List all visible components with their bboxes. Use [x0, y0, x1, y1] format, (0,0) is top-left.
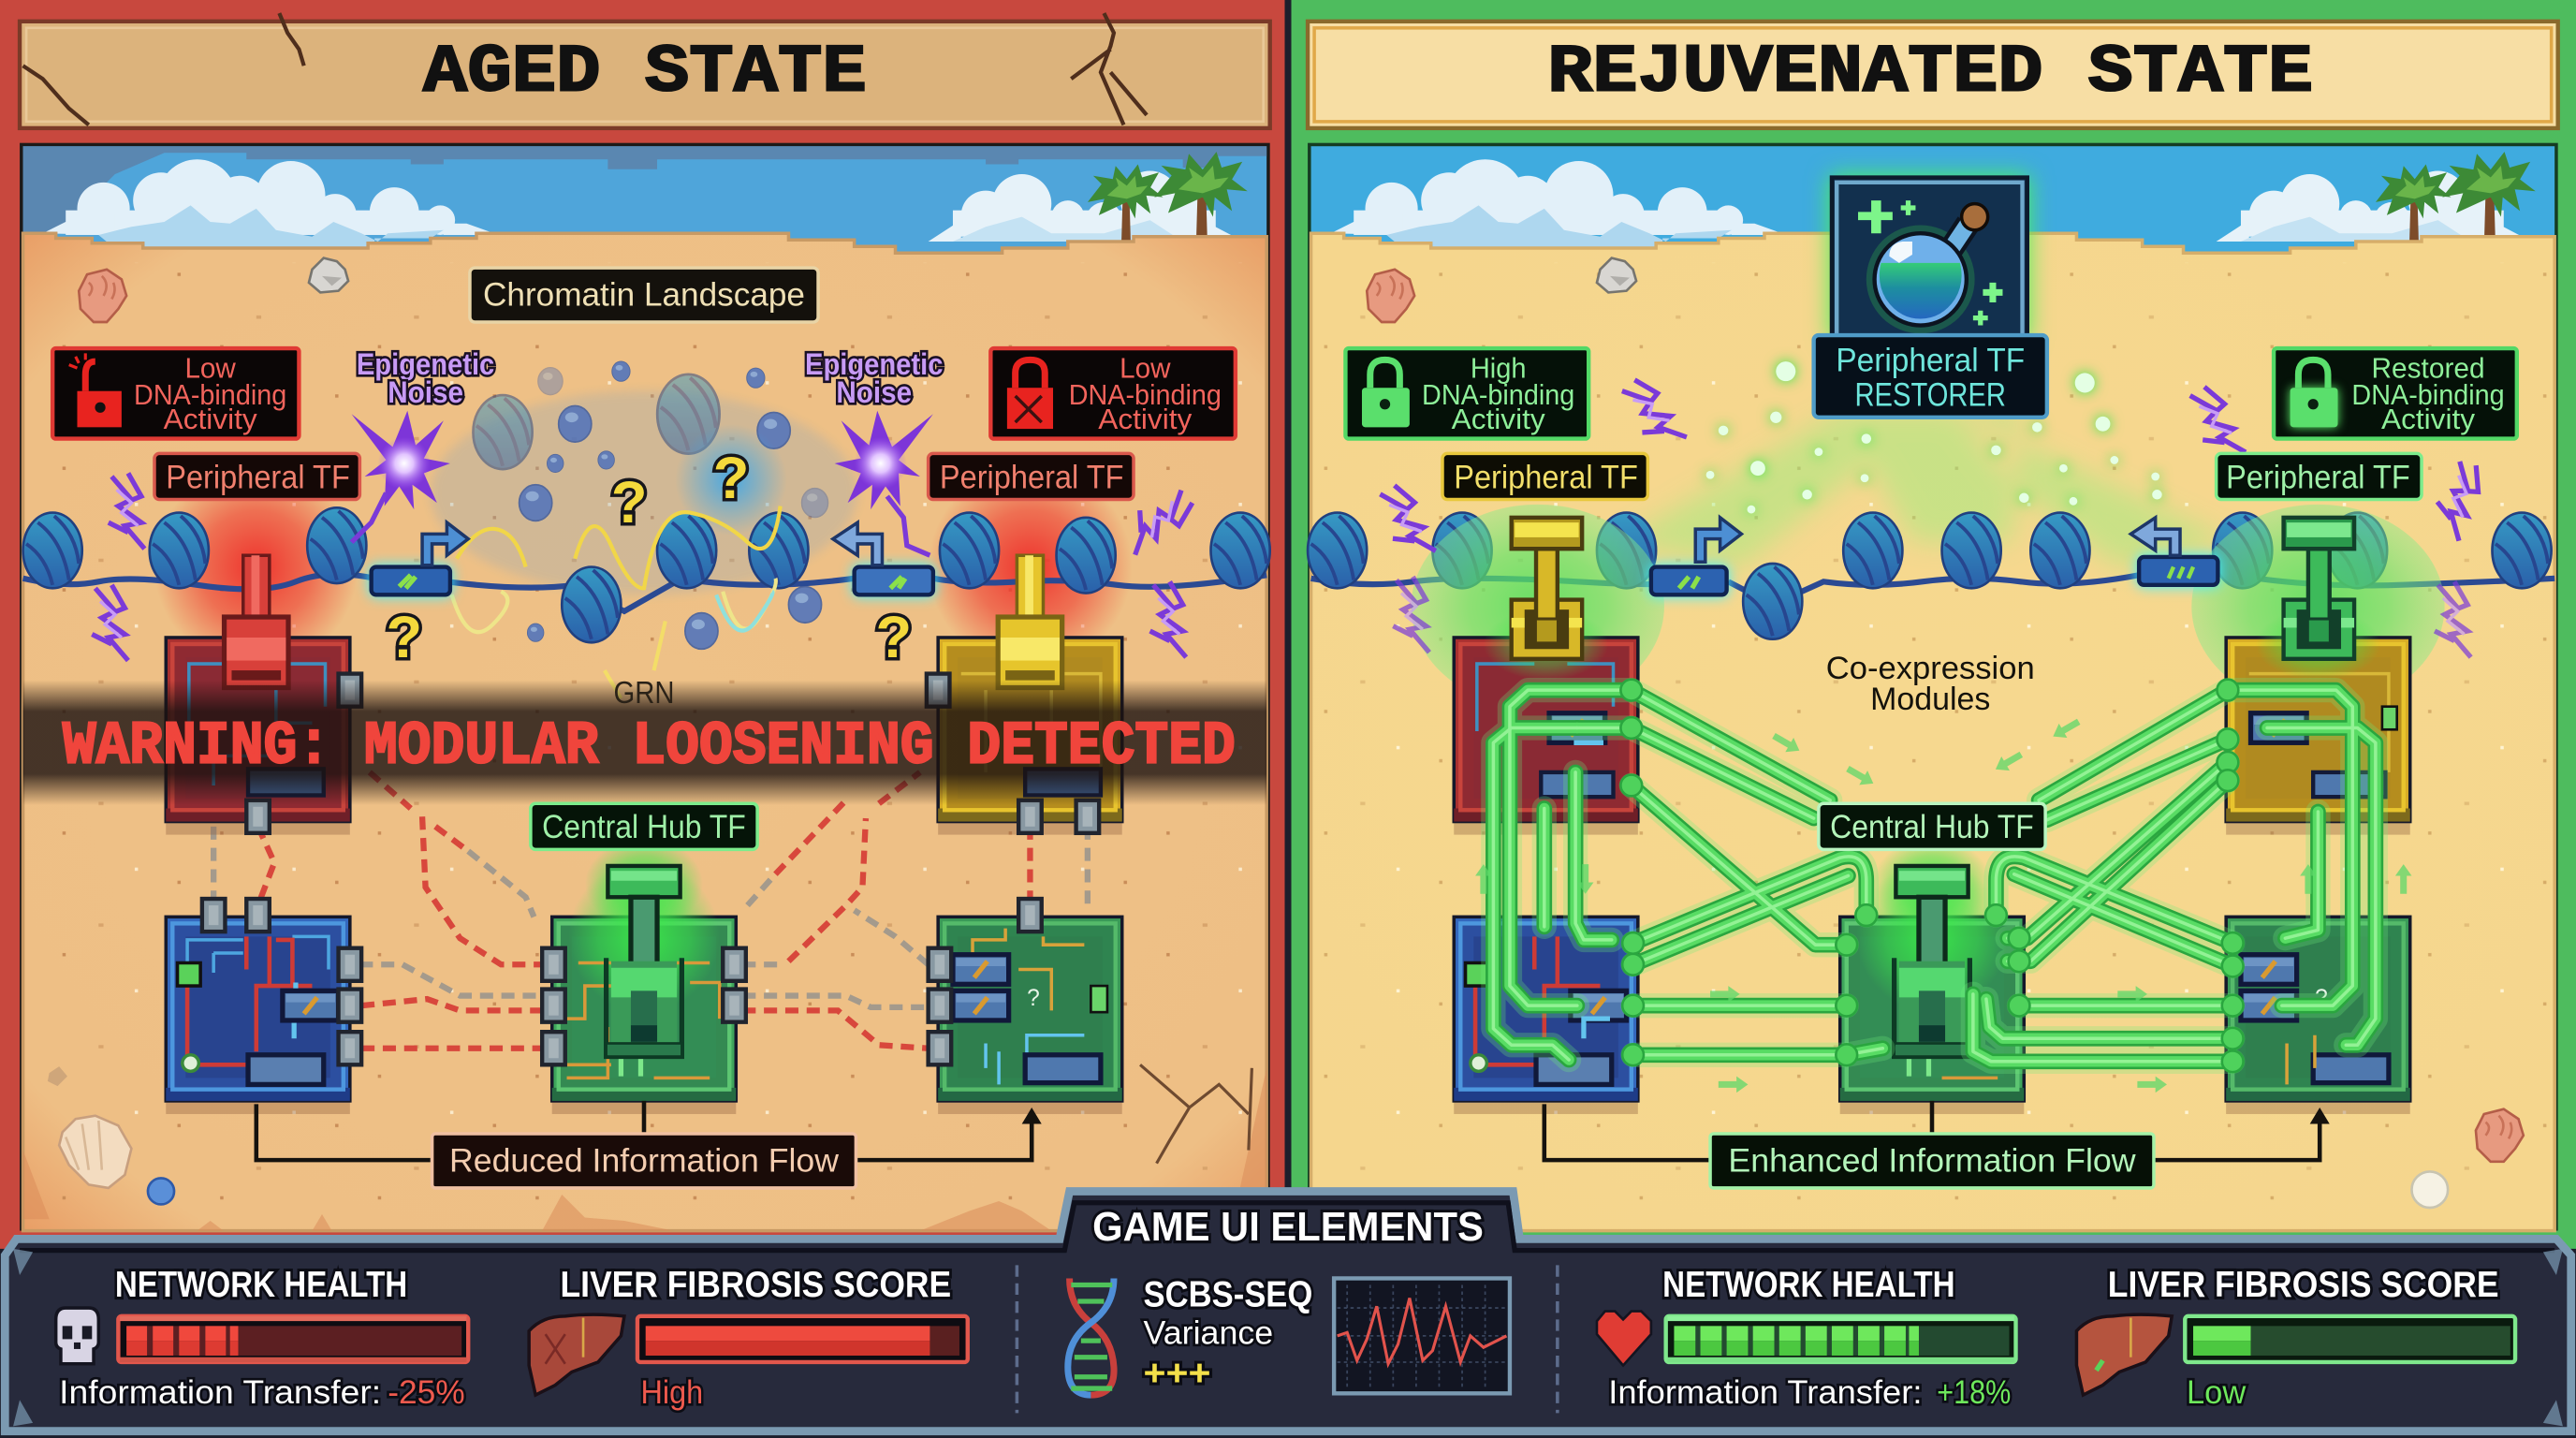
HUD title: GAME UI ELEMENTS [1092, 1204, 1484, 1250]
status box: low binding right: Activity [1098, 403, 1193, 435]
epigenetic noise left: Noise [388, 375, 463, 409]
glow behind question [675, 424, 787, 536]
question marks: ? [611, 470, 648, 536]
epigenetic noise left [352, 347, 494, 542]
GRN label: GRN [614, 676, 674, 711]
status box: low binding right [990, 348, 1236, 439]
promoter right with arrow right panel [2130, 518, 2217, 585]
status box: restored binding [2274, 348, 2517, 439]
HUD frame [5, 1191, 2571, 1431]
SCBS-SEQ readout: SCBS-SEQ [1144, 1274, 1312, 1314]
status box: low binding right: Low [1120, 352, 1171, 385]
lever glow left [1484, 608, 1608, 681]
module: green hub with lever [542, 838, 746, 1114]
potion label [1814, 335, 2047, 418]
aged liver fibrosis [529, 1265, 968, 1411]
question marks [386, 446, 912, 670]
protective dome right [2191, 505, 2445, 708]
lever: red peripheral TF [222, 555, 291, 690]
rejuvenated liver fibrosis: LIVER FIBROSIS SCORE [2108, 1265, 2499, 1305]
chromatin strand right [1308, 513, 2554, 639]
potion label: Peripheral TF [1836, 343, 2025, 379]
label: central hub rejuvenated: Central Hub TF [1830, 809, 2034, 845]
aged frame [0, 0, 1284, 1249]
green particles [1706, 361, 2162, 513]
promoter left with arrow [372, 522, 468, 594]
module: green right [929, 899, 1122, 1114]
panel: game UI HUD [5, 1191, 2571, 1431]
status box: low binding left: Low [184, 352, 237, 385]
module: yellow [927, 638, 1122, 835]
rejuvenated network health [1597, 1265, 2016, 1411]
panel: aged state [0, 0, 1284, 1249]
flow callout rejuvenated: Enhanced Information Flow [1728, 1142, 2136, 1179]
aged network health: NETWORK HEALTH [115, 1265, 407, 1305]
SCBS-SEQ readout: +++ [1144, 1354, 1211, 1394]
label: central hub aged: Central Hub TF [542, 809, 746, 845]
aged liver fibrosis: LIVER FIBROSIS SCORE [560, 1265, 951, 1305]
divider left [1016, 1265, 1017, 1413]
status box: restored binding: Activity [2381, 403, 2476, 435]
status box: low binding right: DNA-binding [1069, 378, 1222, 411]
module: red right panel [1454, 638, 1638, 835]
purple sparks right [1376, 372, 2491, 657]
module: yellow right panel [2226, 638, 2410, 835]
flow callout aged: Reduced Information Flow [449, 1142, 840, 1179]
aged network health: Information Transfer: [59, 1374, 381, 1411]
module: green right right panel [2226, 917, 2410, 1114]
question marks: ? [713, 446, 749, 511]
aged network health [56, 1265, 468, 1411]
status box: low binding left: Activity [164, 403, 257, 435]
module: blue right panel [1454, 917, 1638, 1114]
status box: high binding: Activity [1452, 403, 1545, 435]
module: green hub right panel [1840, 838, 2024, 1114]
label: peripheral TF right: Peripheral TF [940, 459, 1123, 495]
rejuvenated liver fibrosis [2076, 1265, 2515, 1411]
label: peripheral TF green: Peripheral TF [2226, 459, 2410, 495]
protective dome left [1412, 505, 1664, 708]
question marks: ? [386, 605, 422, 670]
decorative shells and rocks right [1367, 258, 2524, 1208]
SCBS-SEQ readout: Variance [1144, 1315, 1273, 1352]
aged red glow left [154, 465, 359, 668]
epigenetic noise right: Epigenetic [805, 347, 943, 381]
banner: rejuvenated title: REJUVENATED STATE [1547, 35, 2313, 111]
status box: high binding [1345, 348, 1588, 439]
chromatin label: Chromatin Landscape [483, 276, 805, 313]
panel: rejuvenated state [1292, 0, 2576, 1249]
monitor waveform [1334, 1278, 1510, 1393]
banner: rejuvenated title [1308, 22, 2558, 128]
purple sparks [92, 473, 1201, 661]
aged liver fibrosis: High [640, 1374, 703, 1411]
status box: high binding: High [1471, 352, 1526, 385]
lever glow right [2256, 608, 2380, 681]
module: blue [166, 899, 361, 1114]
lever: yellow restored [1512, 518, 1582, 659]
label: peripheral TF yellow: Peripheral TF [1454, 459, 1638, 495]
faint flow arrows [1475, 714, 2411, 1093]
floating chromatin fragments [431, 361, 857, 649]
beach sand [23, 233, 1266, 1231]
warning band: WARNING: MODULAR LOOSENING DETECTED [63, 712, 1236, 781]
potion rays [1618, 411, 2234, 567]
sky with clouds and palms [20, 143, 1270, 1231]
SCBS-SEQ readout [1068, 1274, 1312, 1395]
divider right [1557, 1265, 1559, 1413]
status box: low binding left [52, 348, 299, 439]
dashed connections [213, 772, 1088, 1049]
beach sand right [1311, 233, 2554, 1231]
decorative shells and rocks [48, 258, 348, 1204]
status box: restored binding: Restored [2371, 352, 2485, 385]
status box: restored binding: DNA-binding [2351, 378, 2505, 411]
rejuvenated frame [1292, 0, 2576, 1249]
status box: low binding left: DNA-binding [134, 378, 286, 411]
rejuvenated network health: NETWORK HEALTH [1662, 1265, 1955, 1305]
epigenetic noise right [805, 347, 943, 555]
label: co-expression modules [1826, 651, 2035, 717]
status box: high binding: DNA-binding [1422, 378, 1574, 411]
promoter left with arrow right panel [1651, 518, 1741, 594]
rejuvenated network health: Information Transfer: [1608, 1374, 1922, 1411]
rejuvenated liver fibrosis: Low [2187, 1374, 2247, 1411]
gene waves [452, 506, 781, 698]
aged network health: -25% [388, 1374, 465, 1411]
module: green right: ? [1027, 986, 1040, 1011]
lever: green restored [2284, 518, 2354, 659]
green information pipes [1493, 680, 2376, 1072]
question marks: ? [875, 605, 912, 670]
potion label: RESTORER [1855, 377, 2006, 414]
label: co-expression modules: Co-expression [1826, 651, 2035, 686]
rejuvenated network health: +18% [1937, 1374, 2011, 1411]
warning band [23, 681, 1266, 805]
module: red [166, 638, 361, 835]
aged red glow right [929, 465, 1132, 668]
chromatin strand aged [23, 507, 1270, 642]
flow callout rejuvenated [1544, 1101, 2330, 1188]
epigenetic noise right: Noise [836, 375, 912, 409]
flow callout aged [256, 1101, 1042, 1188]
potion card [1832, 178, 2027, 340]
label: co-expression modules: Modules [1870, 682, 1990, 717]
lever: yellow peripheral TF [996, 555, 1064, 690]
label: peripheral TF left: Peripheral TF [166, 459, 350, 495]
banner: aged state title: AGED STATE [423, 35, 867, 111]
module: green right right panel: ? [2315, 986, 2328, 1011]
banner: aged state title [20, 13, 1270, 128]
chromatin label [470, 268, 818, 322]
epigenetic noise left: Epigenetic [357, 347, 494, 381]
sky with clouds and palms right [1308, 143, 2558, 1231]
promoter right with arrow [833, 522, 933, 594]
